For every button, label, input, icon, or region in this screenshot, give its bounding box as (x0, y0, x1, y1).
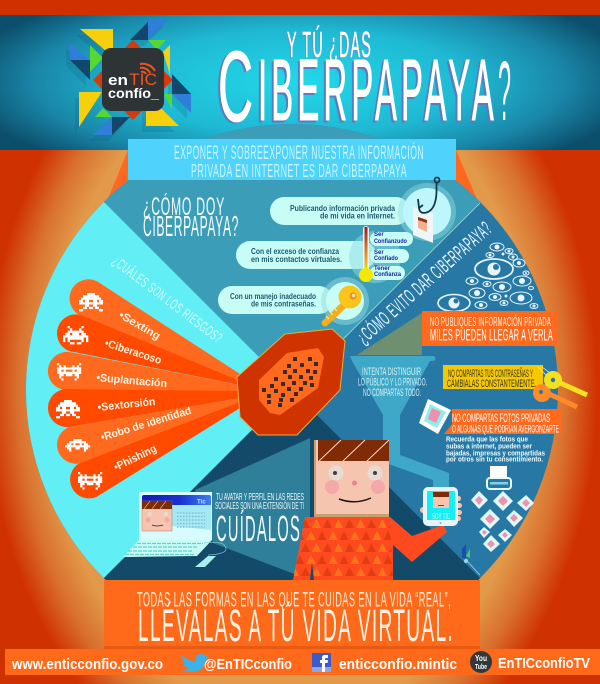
risk: sexting (70, 279, 240, 382)
funnel (350, 356, 449, 490)
logo: enTIC confío: TIC (129, 70, 157, 89)
icon: thermometer: Tener (374, 266, 391, 272)
title: ciberpapaya: C (218, 31, 253, 143)
icon: facebook (312, 653, 331, 672)
text: recuerda: por otros sin tu consentimiento. (446, 454, 543, 464)
icon: thermometer: Ser (374, 250, 384, 256)
text: recuerda: bajadas, impresas y compartidas (446, 448, 545, 458)
heading: cuáles son los riesgos: ¿CUÁLES SON LOS RIESGOS? (109, 253, 226, 347)
icon: youtube (470, 651, 492, 673)
bubble: contraseñas (218, 286, 333, 314)
title: y tú ¿das (286, 24, 372, 66)
heading: cómo doy ciberpapaya (143, 192, 239, 243)
bubble: exceso de confianza: Con el exceso de confianza (251, 247, 339, 256)
top red strip (0, 0, 600, 15)
icon: thermometer: Ser (374, 232, 384, 238)
icon: laptop (123, 492, 226, 567)
text: avatar y perfil (215, 491, 304, 549)
icon: youtube: You (475, 654, 487, 663)
icon: laptop: Tic (197, 500, 206, 506)
footer: facebook page: enticconfio.mintic (339, 657, 457, 673)
footer: website: www.enticconfio.gov.co (11, 657, 163, 673)
risk: phishing (70, 401, 240, 498)
icon: two keys (533, 367, 587, 407)
printed photos (471, 491, 534, 552)
text: recuerda (446, 434, 545, 464)
bubble: publicando información (270, 197, 410, 225)
boy: body (293, 517, 447, 580)
icon: eyes (438, 243, 538, 312)
icon: thermometer: Confianzudo (374, 239, 407, 245)
icon: thermometer (349, 226, 413, 283)
title: ciberpapaya (216, 31, 511, 144)
main circle (26, 124, 558, 580)
title: ciberpapaya: C (216, 32, 251, 144)
funnel: LO PÚBLICO Y LO PRIVADO. (358, 376, 427, 388)
risk: robo de identidad: •Robo de identidad (99, 405, 193, 444)
header band (0, 15, 600, 150)
risk: robo de identidad (57, 398, 240, 464)
icon: sad photo (419, 399, 451, 434)
risk: ciberacoso (57, 314, 240, 385)
callout: no compartas fotos (444, 409, 562, 436)
bubble: exceso de confianza: en mis contactos virtuales. (251, 255, 342, 264)
bubble: contraseñas: Con un manejo inadecuado (230, 292, 316, 301)
text: SOCIALES SON UNA EXTENSIÓN DE TI (215, 499, 304, 512)
bubble: contraseñas: de mis contraseñas. (251, 300, 316, 308)
bottom message box (104, 580, 480, 651)
callout: no compartas contraseñas (443, 365, 543, 390)
orange banner wings (105, 150, 480, 206)
funnel: NO COMPARTAS TODO. (363, 387, 421, 399)
callout: no publiques (422, 311, 558, 346)
footer bar (5, 649, 600, 675)
logo: enTIC confío: en (108, 72, 128, 89)
risk: sextorsión: •Sextorsión (97, 396, 156, 414)
icon: printer (487, 466, 511, 489)
text: CIBERPAPAYA? (143, 211, 239, 243)
risk: ciberacoso: •Ciberacoso (103, 337, 163, 367)
footer: youtube channel: EnTICconfioTV (498, 656, 590, 672)
icon: twitter bird (181, 654, 208, 672)
heading: cómo doy ciberpapaya: ¿CÓMO DOY (143, 192, 225, 221)
designer mark (462, 544, 480, 575)
text: Y TÚ ¿DAS (287, 24, 372, 65)
logo: enTIC confío: confío_ (108, 85, 159, 101)
banner: definition (128, 139, 456, 181)
icon: big key (321, 277, 369, 325)
boy: head (314, 440, 389, 517)
icon: thermometer: Confianza (374, 272, 402, 278)
text: Y TÚ ¿DAS (286, 25, 371, 66)
bubble: publicando información: de mi vida en Internet. (320, 212, 395, 220)
risk: suplantación: •Suplantación (96, 372, 168, 390)
icon: hook and card (398, 178, 456, 243)
text: CUÍDALOS (216, 508, 301, 549)
risk: sextorsión (48, 389, 240, 427)
logo: enTIC confío (66, 20, 191, 141)
bubble: publicando información: Publicando información privada (290, 204, 395, 213)
papaya (237, 329, 345, 435)
risk: phishing: •Phishing (112, 443, 159, 474)
bubble: exceso de confianza (236, 241, 376, 269)
icon: thermometer: Confiado (374, 256, 398, 262)
funnel: INTENTA DISTINGUIR (362, 366, 421, 378)
footer: twitter handle: @EnTICconfio (204, 657, 292, 673)
risk: suplantación (48, 352, 240, 392)
risk: sexting: •Sexting (116, 309, 162, 343)
text: recuerda: subas a internet, pueden ser (446, 442, 532, 450)
icon: tablet: SOY TIC (432, 512, 450, 521)
text: ? (498, 44, 511, 138)
icon: youtube: Tube (475, 662, 487, 671)
text: TU AVATAR Y PERFIL EN LAS REDES (216, 491, 304, 503)
icon: tablet (420, 487, 462, 526)
text: recuerda: Recuerda que las fotos que (446, 434, 528, 444)
risk fan (48, 279, 240, 498)
